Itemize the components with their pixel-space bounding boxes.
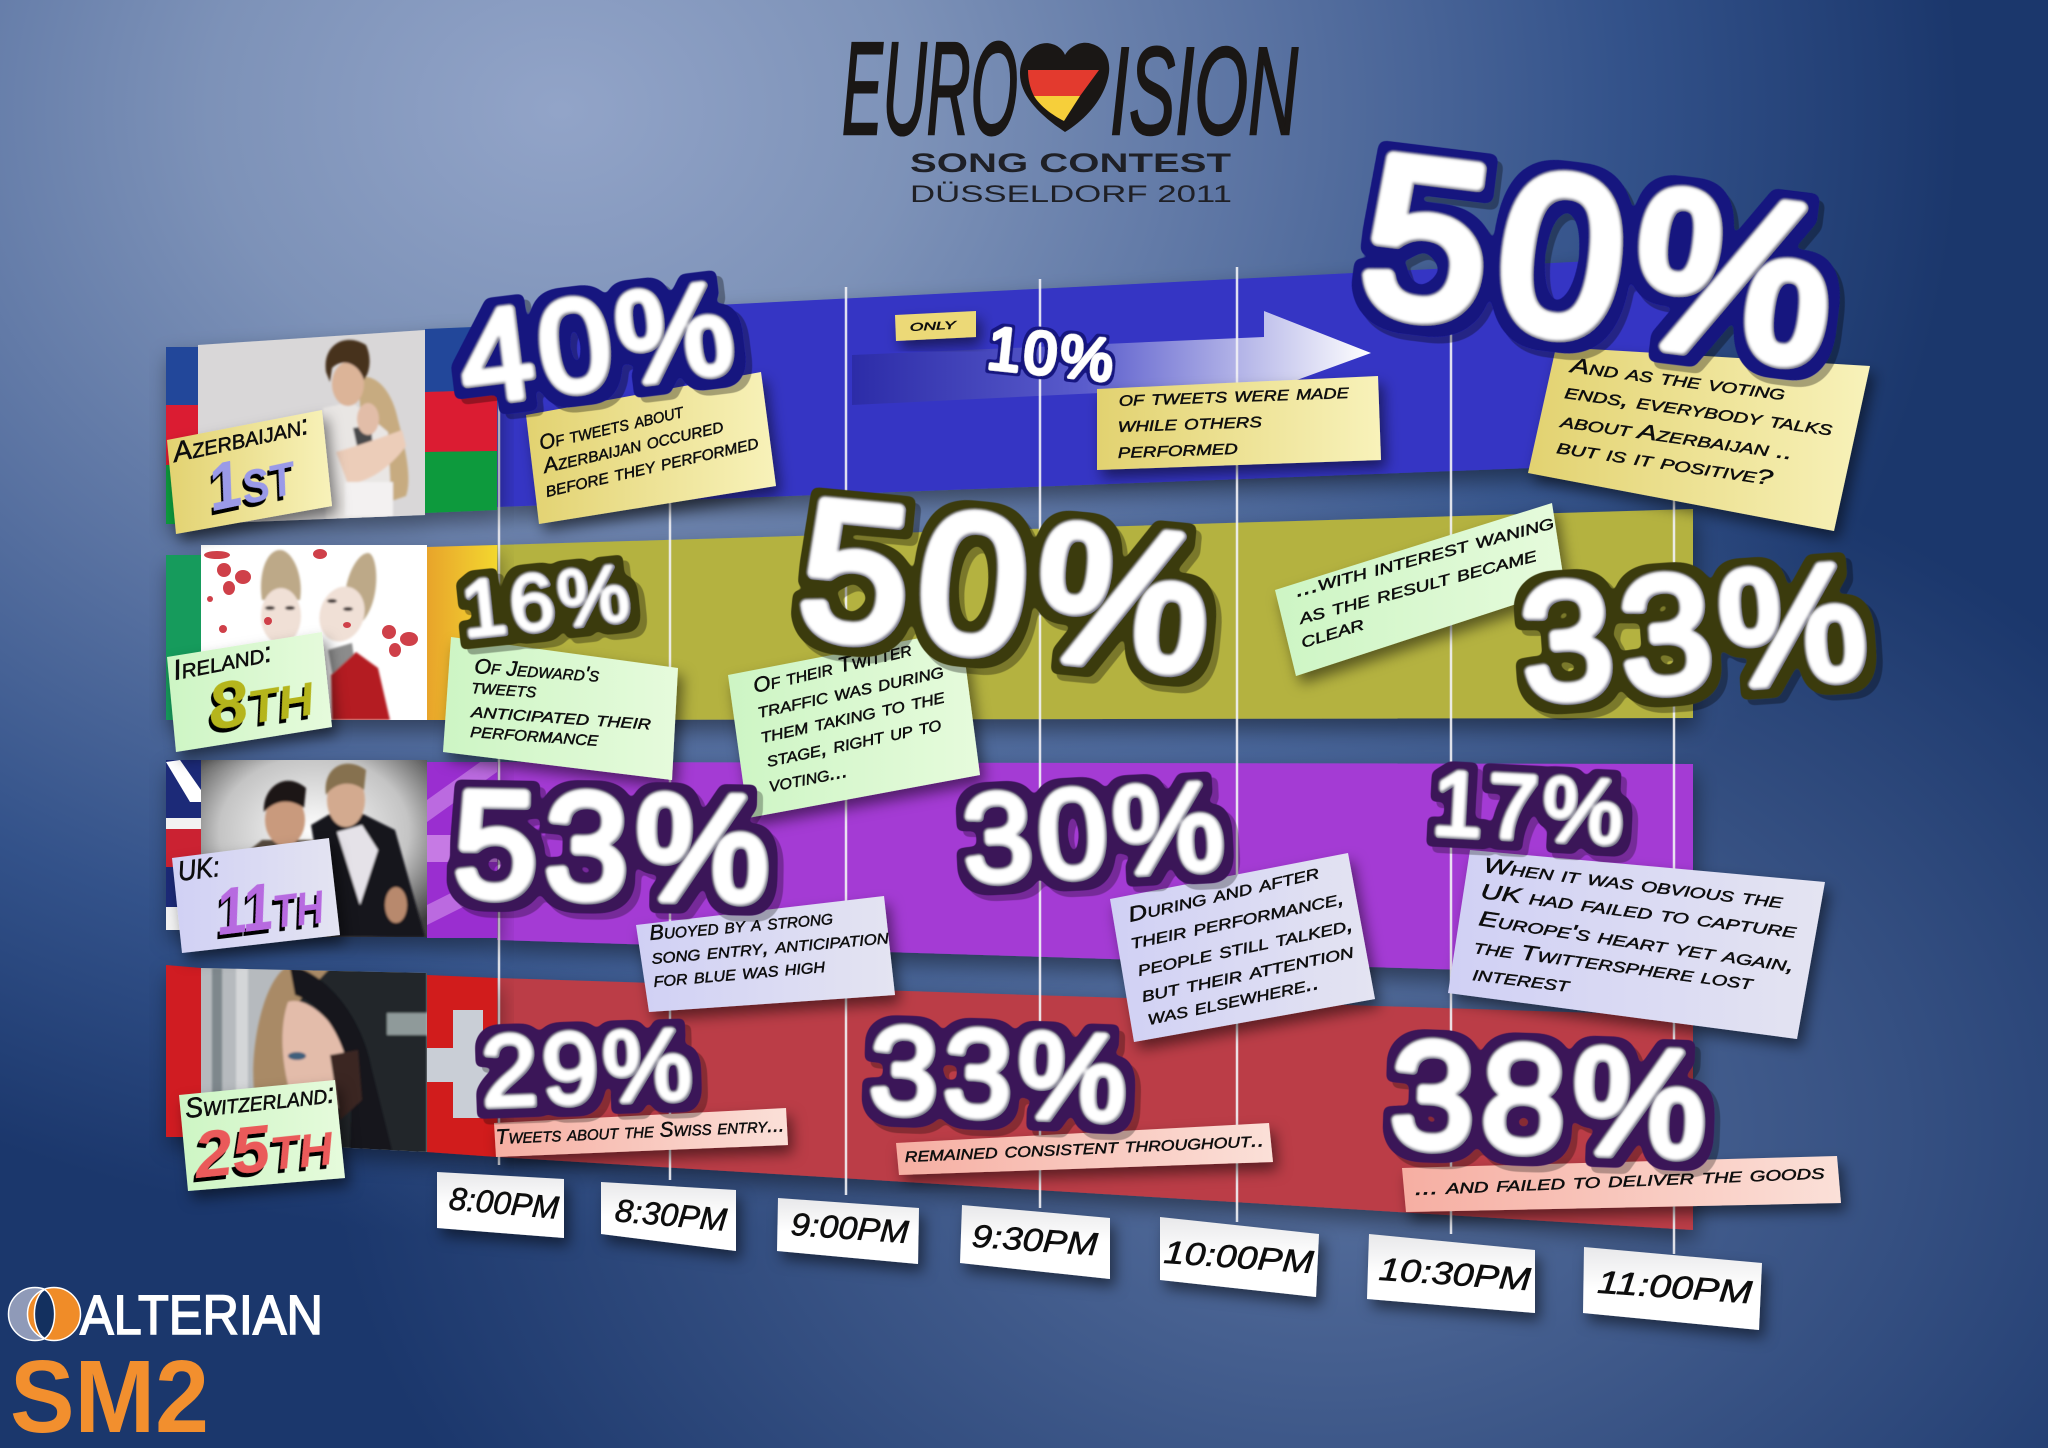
time label: 9:30PM: [960, 1205, 1110, 1279]
rank card: UK: 11th: [212, 862, 328, 949]
note: UK during and after: but their attention: [1139, 939, 1356, 1007]
bar: UK: [497, 762, 1693, 977]
time label: 10:00PM: 10:00PM: [1163, 1234, 1315, 1280]
stat: UK 53%: 53%: [453, 760, 779, 934]
note: remained consistent: remained consistent throughout..: [904, 1128, 1265, 1167]
note: Jedward anticipation: anticipated their: [469, 699, 652, 735]
photo: Blue: [201, 760, 427, 940]
rank card: Ireland: 8th: [203, 654, 319, 744]
stat: Switzerland 33%: 33%: [868, 1002, 1136, 1148]
rank card: Switzerland: Switzerland:: [183, 1077, 336, 1124]
stat: UK 17%: 17%: [1431, 754, 1631, 865]
time label: 10:00PM: [1160, 1217, 1319, 1297]
stat: Ireland 50%: 50%: [792, 459, 1230, 717]
rank card: Ireland: [167, 632, 332, 752]
icon: Alterian rings: [8, 1288, 80, 1340]
stat: Azerbaijan 50%: 50%: [1350, 109, 1859, 415]
note: UK during and after: people still talked,: [1135, 913, 1355, 981]
song contest: SONG CONTEST: [910, 148, 1232, 178]
rank card: Azerbaijan: [167, 409, 332, 534]
venue and year: DÜSSELDORF 2011: [910, 181, 1232, 208]
note: tweets about Swiss entry: Tweets about the Swiss entry...: [495, 1113, 785, 1149]
note: UK during and after: [1110, 853, 1375, 1042]
rank card: Azerbaijan: 1st: [201, 434, 303, 525]
timeline gridlines: [499, 255, 1674, 1254]
note: Ireland during stage time: stage, right up to: [764, 712, 943, 772]
photo: Swiss singer: [201, 968, 427, 1153]
rank card: Azerbaijan: Azerbaijan:: [168, 409, 311, 468]
note: only: only: [909, 316, 957, 335]
stat: Switzerland 38%: 38%: [1389, 1010, 1717, 1190]
note: tweets while others performed: [1097, 376, 1381, 470]
stat: Switzerland 29%: 29%: [481, 1009, 700, 1129]
time label: 8:00PM: 8:00PM: [448, 1180, 561, 1226]
note: Ireland during stage time: Of their Twitter: [751, 638, 914, 698]
time label: 8:30PM: 8:30PM: [614, 1192, 729, 1238]
time label: 10:30PM: 10:30PM: [1378, 1251, 1532, 1297]
stat: UK 30%: 30%: [960, 758, 1234, 910]
note: UK lost interest: Europe's heart yet again,: [1477, 907, 1796, 977]
note: interest waning: clear: [1298, 612, 1367, 653]
note: Azerbaijan before performance: [526, 372, 776, 524]
note: Ireland during stage time: [728, 630, 980, 818]
panel: Azerbaijan flag and photo: [166, 326, 497, 525]
stat: Azerbaijan 10%: 10%: [984, 314, 1120, 395]
note: Jedward anticipation: tweets: [471, 675, 537, 703]
rank card: Switzerland: 25th: [189, 1104, 336, 1192]
note: UK lost interest: [1448, 850, 1825, 1039]
note: UK lost interest: When it was obvious the: [1482, 854, 1785, 913]
panel: Ireland flag and photo: [166, 545, 497, 720]
rank card: Ireland: Ireland:: [170, 636, 274, 686]
note: UK during and after: was elsewhere..: [1145, 971, 1321, 1030]
note: UK lost interest: interest: [1471, 962, 1573, 997]
note: as the voting ends: about Azerbaijan ..: [1558, 409, 1794, 465]
time label: 8:00PM: [437, 1172, 564, 1238]
note: interest waning: ...with interest waning: [1292, 510, 1557, 602]
bar: Ireland: [497, 509, 1693, 720]
rank card: Switzerland: [179, 1077, 345, 1192]
photo: Jedward: [201, 545, 427, 720]
time label: 8:30PM: [601, 1182, 736, 1251]
wordmark: Alterian: ALTERIAN: [80, 1283, 323, 1346]
time label: 9:30PM: 9:30PM: [971, 1218, 1099, 1262]
note: interest waning: as the result became: [1295, 543, 1540, 629]
wordmark right: ISION: [1110, 23, 1298, 161]
panel: Switzerland flag and photo: [166, 965, 497, 1157]
note: failed to deliver: [1402, 1156, 1841, 1212]
note: Azerbaijan before performance: before they performed: [543, 430, 761, 502]
logo: Eurovision Song Contest Düsseldorf 2011: [842, 15, 1298, 208]
note: interest waning: [1275, 503, 1565, 676]
icon: Swiss cross: [427, 1010, 497, 1118]
stat: Ireland 33%: 33%: [1516, 529, 1880, 736]
note: tweets while others performed: of tweets were made: [1118, 380, 1350, 411]
note: Ireland during stage time: them taking to the: [758, 684, 948, 748]
stat: Ireland 16%: 16%: [458, 548, 638, 655]
time label: 9:00PM: 9:00PM: [790, 1206, 910, 1250]
time label: 11:00PM: [1583, 1247, 1762, 1330]
logo: Alterian SM2: [8, 1283, 323, 1448]
note: Azerbaijan before performance: Of tweets about: [537, 399, 687, 455]
note: UK lost interest: the Twittersphere lost: [1472, 935, 1756, 995]
note: only: [895, 311, 976, 341]
note: UK during and after: their performance,: [1128, 886, 1346, 954]
note: Blue anticipation: Buoyed by a strong: [648, 906, 834, 945]
note: failed to deliver: ... and failed to deliver the goods: [1414, 1161, 1825, 1200]
logo: Eurovision Song Contest Düsseldorf 2011: EURO: [842, 15, 1018, 162]
note: Jedward anticipation: Of Jedward's: [474, 655, 600, 687]
note: Ireland during stage time: traffic was during: [755, 659, 946, 723]
time label: 11:00PM: 11:00PM: [1596, 1264, 1754, 1310]
note: Azerbaijan before performance: Azerbaijan occured: [539, 414, 726, 478]
bar: Azerbaijan: [497, 256, 1693, 507]
rank card: UK: [172, 838, 340, 953]
note: as the voting ends: [1528, 347, 1870, 531]
time label: 9:00PM: [777, 1198, 919, 1264]
note: UK during and after: During and after: [1126, 861, 1321, 927]
note: Ireland during stage time: voting...: [767, 759, 849, 797]
note: tweets while others performed: while others: [1117, 409, 1262, 437]
note: as the voting ends: ends, everybody talks: [1563, 380, 1834, 441]
bar: Switzerland: [497, 978, 1693, 1230]
time label: 10:30PM: [1367, 1234, 1535, 1313]
note: Jedward anticipation: performance: [470, 719, 600, 751]
note: Blue anticipation: song entry, anticipation: [650, 925, 890, 969]
arrow: attention sweep on Azerbaijan bar: [852, 311, 1371, 405]
photo: Azerbaijan duo: [198, 330, 425, 525]
rank card: UK: UK:: [176, 851, 221, 887]
note: as the voting ends: but is it positive?: [1555, 435, 1775, 490]
note: UK lost interest: UK had failed to capture: [1479, 880, 1799, 943]
note: Blue anticipation: [636, 896, 895, 1012]
panel: UK flag and photo: [166, 750, 497, 940]
note: as the voting ends: And as the voting: [1567, 354, 1787, 405]
note: Blue anticipation: for blue was high: [652, 954, 826, 992]
note: tweets while others performed: performed: [1117, 436, 1238, 463]
icon: German flag heart: [1020, 43, 1109, 132]
note: Jedward anticipation: [443, 637, 678, 780]
stat: Azerbaijan 40%: 40%: [452, 253, 748, 432]
note: remained consistent: [896, 1123, 1273, 1175]
